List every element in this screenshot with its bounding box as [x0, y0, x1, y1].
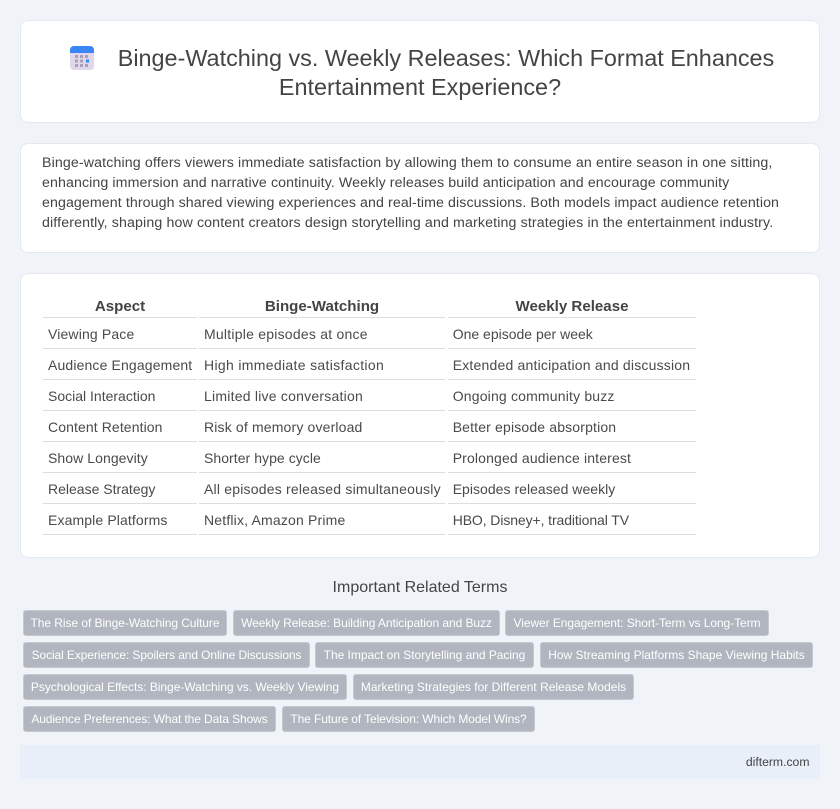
- comparison table: Limited live conversation: [204, 388, 363, 404]
- tag list: related terms: The Rise of Binge-Watching Culture: [31, 616, 219, 630]
- tag list: related terms: How Streaming Platforms Shape Viewing Habits: [548, 648, 805, 662]
- comparison table: Better episode absorption: [453, 419, 616, 435]
- footer bar: [20, 745, 820, 779]
- title: Entertainment Experience?: [279, 74, 561, 100]
- comparison table: High immediate satisfaction: [204, 357, 384, 373]
- footer text: difterm.com: [746, 755, 810, 769]
- tag list: related terms: Social Experience: Spoilers and Online Discussions: [32, 648, 301, 662]
- comparison table: Audience Engagement: [48, 357, 192, 373]
- comparison table: Extended anticipation and discussion: [453, 357, 690, 373]
- comparison table: Example Platforms: [48, 512, 168, 528]
- tag list: related terms: Weekly Release: Building Anticipation and Buzz: [241, 616, 492, 630]
- heading: related terms: Important Related Terms: [333, 579, 507, 596]
- comparison table: Viewing Pace: [48, 326, 134, 342]
- tag list: related terms: Viewer Engagement: Short-Term vs Long-Term: [514, 616, 760, 630]
- comparison table: Release Strategy: [48, 481, 155, 497]
- text block: intro: Binge-watching offers viewers immediate satisfaction by allowing them to consume an entire season in one sitting,: [42, 155, 772, 171]
- title: [118, 45, 774, 100]
- icon: calendar: [70, 46, 94, 70]
- comparison table: Weekly Release: [515, 298, 628, 314]
- tag list: related terms: Audience Preferences: What the Data Shows: [31, 712, 268, 726]
- panel: title header: [20, 20, 820, 123]
- tag list: related terms: The Future of Television: Which Model Wins?: [290, 712, 527, 726]
- comparison table: Risk of memory overload: [204, 419, 363, 435]
- comparison table: [43, 298, 696, 535]
- comparison table: Multiple episodes at once: [204, 326, 368, 342]
- comparison table: Content Retention: [48, 419, 163, 435]
- comparison table: Show Longevity: [48, 450, 148, 466]
- comparison table: Aspect: [95, 298, 145, 314]
- comparison table: Shorter hype cycle: [204, 450, 321, 466]
- comparison table: One episode per week: [453, 326, 593, 342]
- comparison table: All episodes released simultaneously: [204, 481, 441, 497]
- comparison table: Ongoing community buzz: [453, 388, 615, 404]
- tag list: related terms: Psychological Effects: Binge-Watching vs. Weekly Viewing: [31, 680, 339, 694]
- panel: comparison table: [20, 273, 820, 558]
- title: Binge-Watching vs. Weekly Releases: Which Format Enhances: [118, 45, 774, 71]
- tag list: related terms: Marketing Strategies for Different Release Models: [361, 680, 626, 694]
- text block: intro: [42, 155, 779, 231]
- comparison table: HBO, Disney+, traditional TV: [453, 512, 629, 528]
- comparison table: Netflix, Amazon Prime: [204, 512, 346, 528]
- text block: intro: engagement through shared viewing experiences and real-time discussions. Both models impact audience retention: [42, 195, 779, 211]
- tag list: related terms: [23, 610, 813, 732]
- text block: intro: enhancing immersion and narrative continuity. Weekly releases build anticipation and encourage community: [42, 175, 729, 191]
- comparison table: Prolonged audience interest: [453, 450, 631, 466]
- comparison table: Binge-Watching: [265, 298, 379, 314]
- comparison table: Social Interaction: [48, 388, 155, 404]
- comparison table: Episodes released weekly: [453, 481, 615, 497]
- tag list: related terms: The Impact on Storytelling and Pacing: [324, 648, 525, 662]
- text block: intro: differently, shaping how content creators design storytelling and marketing strategies in the entertainment industry.: [42, 215, 773, 231]
- panel: intro paragraph: [20, 143, 820, 253]
